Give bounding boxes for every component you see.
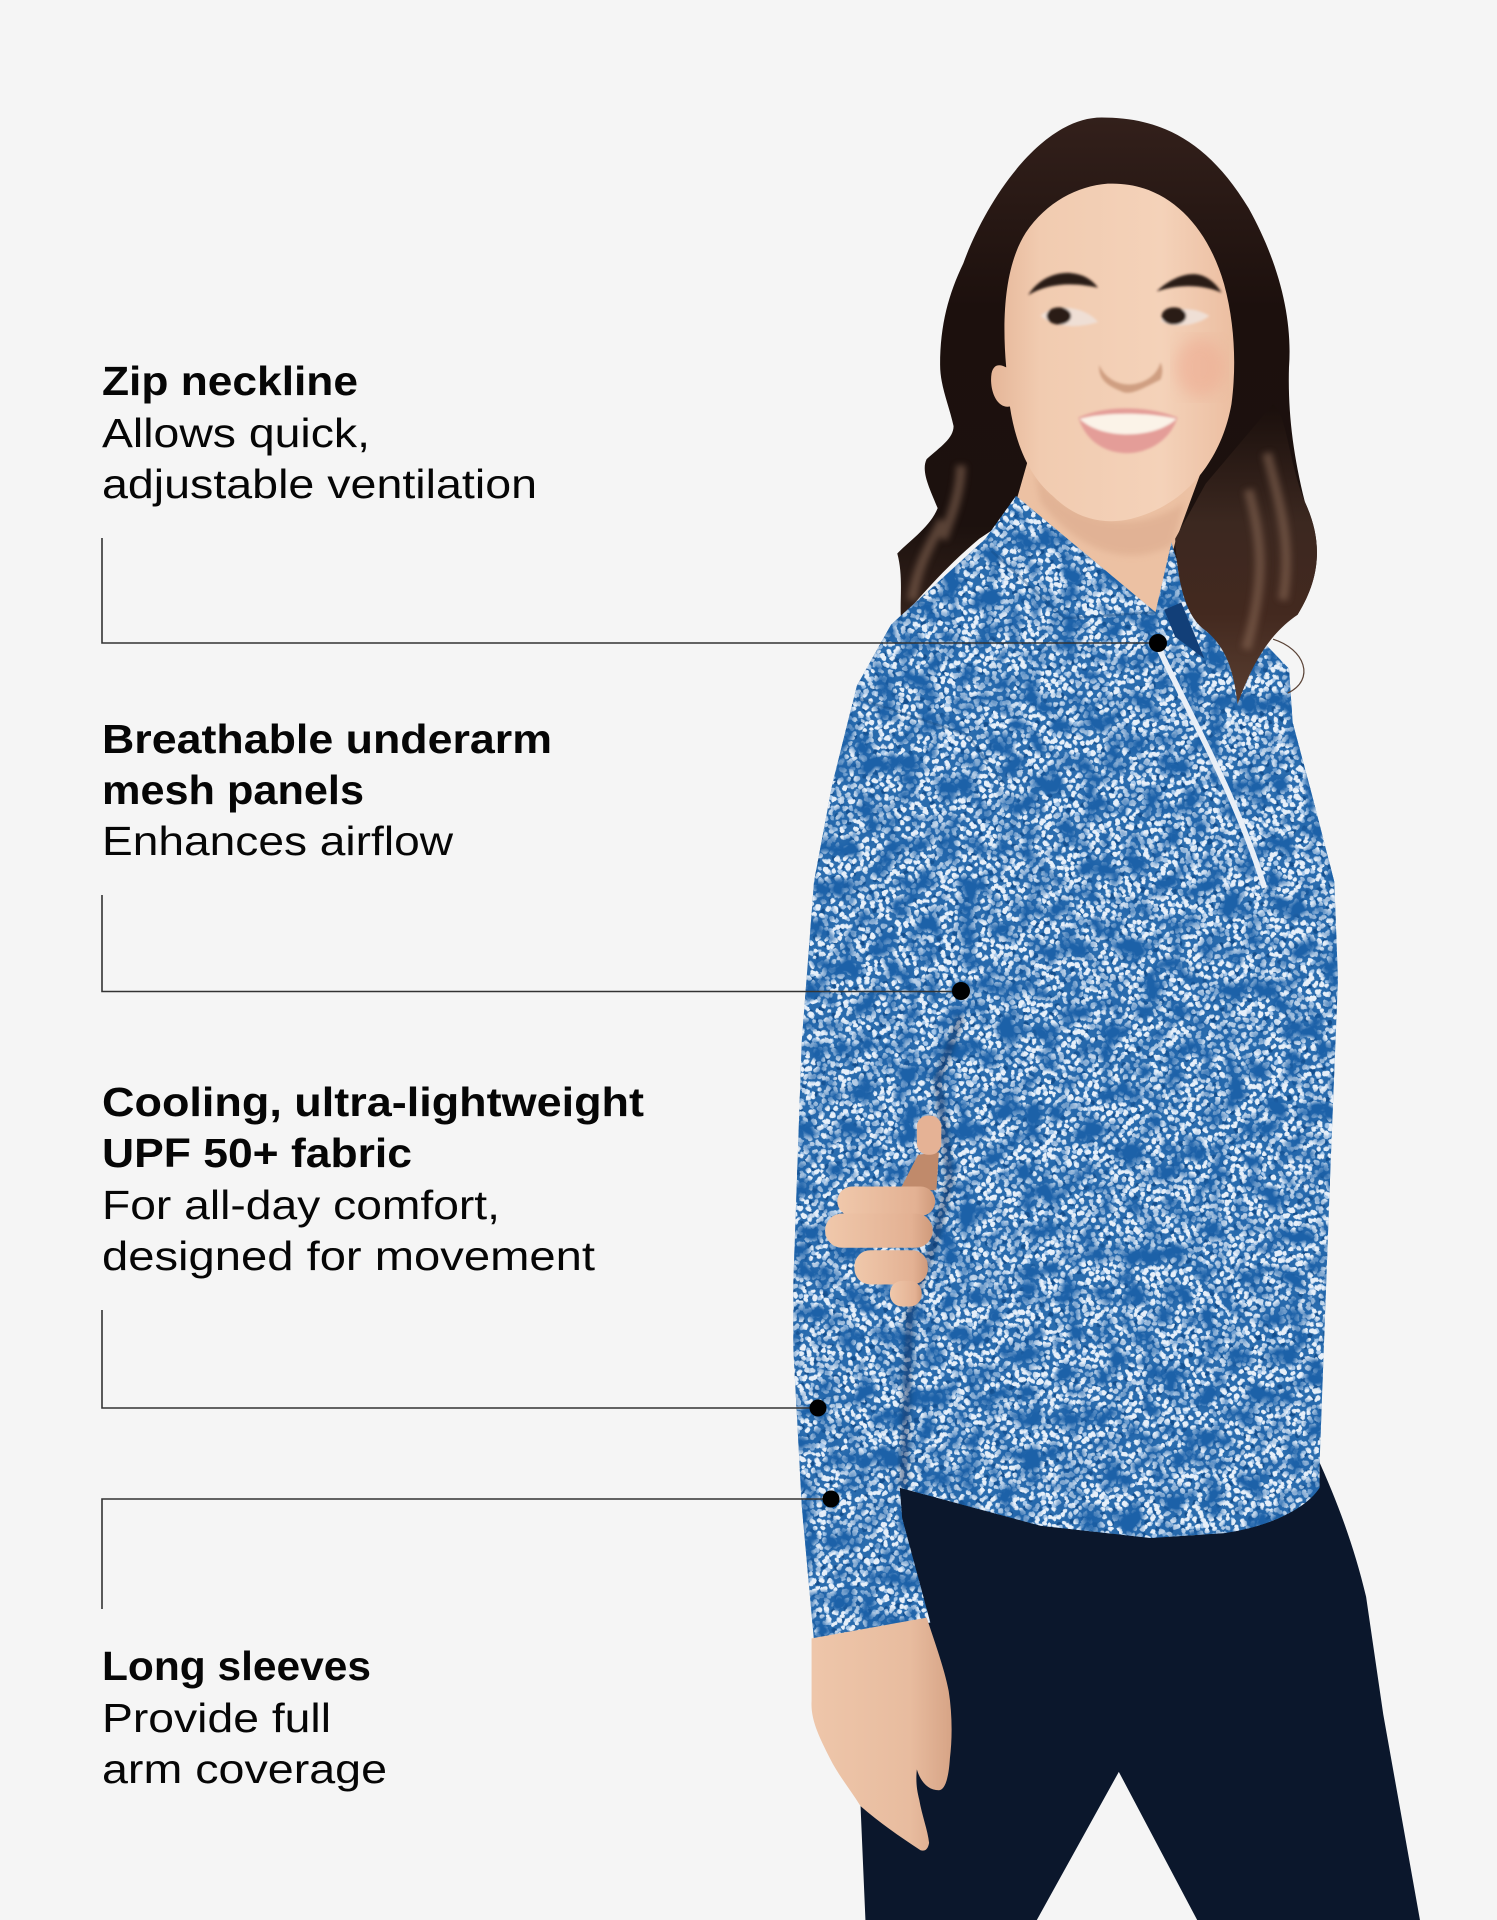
heading: UPF fabric: UPF 50+ fabric [102,1130,412,1176]
description: zip neckline: Allows quick, [102,410,370,456]
marker dot: zip [1149,634,1167,652]
face [991,184,1234,521]
description: UPF fabric: For all-day comfort, [102,1182,500,1228]
eyes [1040,307,1209,326]
description: UPF fabric [102,1182,596,1279]
description: underarm mesh panels: Enhances airflow [102,818,453,864]
arm and torso seam shadow [903,1016,961,1488]
heading: long sleeves: Long sleeves [102,1643,371,1689]
heading: UPF fabric: Cooling, ultra-lightweight [102,1079,644,1125]
hair (back) [897,118,1317,661]
description: UPF fabric: designed for movement [102,1233,596,1279]
mouth [1078,408,1178,453]
stray hair strand [1273,639,1304,693]
neck [1016,459,1206,618]
heading: UPF fabric [102,1079,644,1176]
cheek blush [1175,338,1224,397]
hair highlights [912,453,1286,649]
heading: underarm mesh panels: Breathable underarm [102,716,552,762]
marker dot: sleeve [822,1490,840,1508]
callout: underarm mesh panels [102,716,970,1000]
description: zip neckline [102,410,537,507]
heading: underarm mesh panels [102,716,552,813]
callout: long sleeves [102,1490,840,1792]
leader line to underarm [102,895,961,992]
marker dot: underarm [952,982,970,1000]
leader line to sleeve [102,1499,831,1609]
hair (front right) [1175,404,1317,704]
hand resting on hip [825,1116,941,1307]
heading: zip neckline: Zip neckline [102,358,358,404]
collar tip [1164,602,1205,659]
zipper [1158,647,1264,888]
leader line to zip [102,538,1158,643]
description: long sleeves: arm coverage [102,1746,387,1792]
eyebrows [1028,273,1222,295]
description: long sleeves: Provide full [102,1695,331,1741]
pants [861,1457,1420,1920]
hand at side [811,1618,952,1851]
leader line to fabric [102,1310,818,1408]
nose shadow [1099,362,1162,393]
shirt with printed fabric texture [771,478,1359,1653]
heading: underarm mesh panels: mesh panels [102,767,364,813]
description: zip neckline: adjustable ventilation [102,461,537,507]
callout: UPF fabric [102,1079,826,1416]
collar fold [857,551,1156,784]
photo: woman wearing blue printed long sleeve zip polo [771,118,1420,1920]
description: long sleeves [102,1695,387,1792]
callout: zip neckline [102,358,1167,652]
marker dot: fabric [810,1400,826,1416]
neck shadow under chin [1034,471,1185,555]
